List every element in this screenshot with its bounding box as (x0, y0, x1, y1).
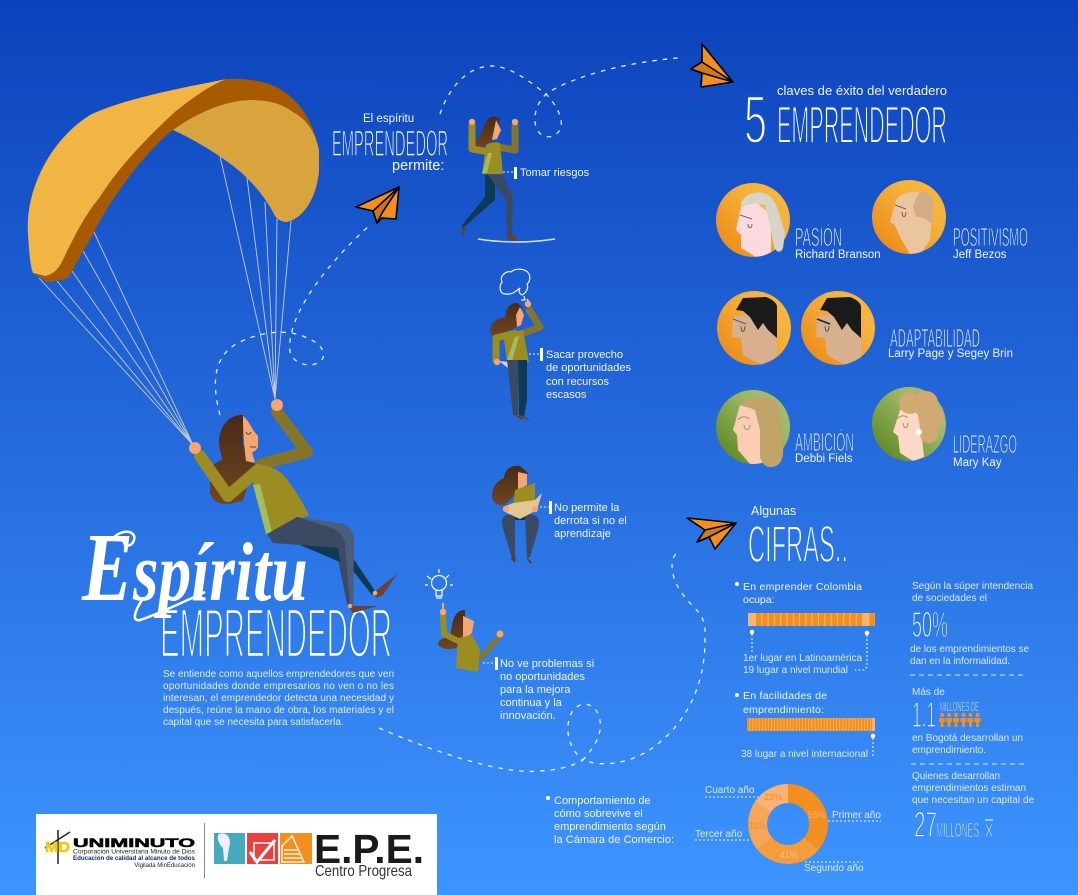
label: No ve problemas: no oportunidades (500, 671, 586, 683)
logo: E.P.E. wordmark: Centro Progresa (315, 863, 412, 880)
logo: Uniminuto: MD (45, 839, 70, 856)
label: No ve problemas (483, 657, 594, 722)
logo: E.P.E. icons (214, 833, 312, 864)
heading: 5 claves (744, 82, 947, 158)
donut chart: survival by year: 23% (764, 792, 782, 802)
logo: E.P.E. wordmark: E.P.E. (314, 826, 424, 872)
paraglider illustration (28, 79, 397, 613)
dashed flight path: from paraglider to paper plane (215, 225, 370, 415)
label: Tomar riesgos: Tomar riesgos (520, 167, 590, 179)
donut chart: survival by year: 41% (780, 850, 798, 860)
heading: Algunas cifras: Algunas (751, 504, 796, 518)
heading: Algunas cifras (748, 504, 848, 574)
label: No ve problemas: continua y la (500, 697, 563, 709)
logo footer panel (36, 814, 437, 895)
stat: 50% informality: dan en la informalidad. (910, 656, 1010, 667)
paper plane: top (691, 44, 733, 87)
stat: 27 million capital: que necesitan un capital de (912, 795, 1034, 806)
label: Comportamiento: emprendimiento según (554, 821, 666, 833)
dashed flight path: bottom loop (379, 550, 705, 771)
label: No ve problemas: No ve problemas si (500, 658, 594, 670)
stat: Colombia ranking: 1er lugar en Latinoamérica (743, 653, 862, 664)
figure: woman with thought cloud (490, 269, 540, 421)
label: Liderazgo (953, 429, 1017, 469)
stat: 27 million capital: X (985, 821, 993, 841)
figure: woman taking risks (461, 117, 555, 242)
stat: 50% informality: Según la súper intendencia (912, 581, 1033, 592)
heading: El espíritu emprendedor permite: El espíritu (363, 113, 414, 125)
stat: 50% informality: de sociedades el (912, 593, 987, 604)
paraglider lines (39, 156, 291, 445)
heading: 5 claves: 5 (744, 82, 767, 158)
donut chart: survival by year: 55% (808, 810, 826, 820)
portrait: Debbi Fields (716, 390, 790, 467)
stat: 27 million capital: MILLONES (936, 820, 979, 842)
donut chart: survival by year: 31% (748, 821, 766, 831)
stat: 1.1 million people: en Bogotá desarrollan un (912, 733, 1023, 744)
label: Sacar provecho: con recursos (546, 376, 609, 388)
text: CIFRAS.. (748, 516, 848, 574)
stat: 50% informality: 50% (912, 604, 948, 645)
label: Pasión: Richard Branson (795, 249, 881, 261)
label: Positivismo (953, 222, 1028, 261)
canopy (28, 79, 321, 282)
label: Sacar provecho: Sacar provecho (546, 349, 623, 361)
portrait: Mary Kay (872, 387, 946, 461)
logo: Uniminuto: Vigilada MinEducación (134, 863, 195, 869)
label: No permite la derrota: aprendizaje (554, 528, 611, 540)
heading: El espíritu emprendedor permite (332, 113, 448, 174)
progress bar: rank (748, 613, 875, 626)
portrait: Jeff Bezos (872, 180, 946, 254)
portrait: Larry Page (717, 291, 791, 365)
donut chart: survival by year: Segundo año (804, 863, 864, 874)
label: Adaptabilidad: Larry Page y Segey Brin (888, 348, 1013, 360)
donut chart: survival by year (695, 784, 881, 874)
stat: Colombia ranking: 19 lugar a nivel mundial (743, 665, 848, 676)
portrait: Richard Branson (716, 183, 790, 257)
paper plane: lower-left of top section (356, 187, 399, 223)
stat: 1.1 million people: Más de (912, 687, 945, 698)
description paragraph: oportunidades donde empresarios no ven o no les (163, 681, 394, 692)
stat: Colombia ranking: ocupa: (743, 594, 775, 606)
stat: 27 million capital: Quienes desarrollan (912, 771, 1000, 782)
figure: woman reading map (492, 466, 542, 564)
paper plane: cifras (687, 518, 736, 549)
figure: woman with light bulb (425, 569, 504, 672)
stat: 1.1 million people: emprendimiento. (912, 745, 986, 756)
stat: 1.1 million people: 1.1 (912, 694, 936, 735)
label: Positivismo: Jeff Bezos (953, 249, 1007, 261)
label: Adaptabilidad (888, 323, 1013, 360)
logo: Uniminuto: Educación de calidad al alcance de todos (73, 856, 196, 862)
label: Comportamiento: Comportamiento de (554, 795, 651, 807)
portrait: Sergey Brin (801, 291, 875, 365)
label: Ambición: Debbi Fiels (795, 453, 853, 465)
donut chart: survival by year: Cuarto año (705, 785, 755, 796)
icon: people row (939, 713, 980, 727)
text: AMBICIÓN (795, 427, 854, 457)
logo: Uniminuto (45, 830, 196, 869)
label: Ambición (795, 427, 854, 465)
heading: 5 claves: claves de éxito del verdadero (777, 84, 947, 98)
label: Comportamiento (546, 795, 674, 846)
stat: 50% informality: de los emprendimientos se (910, 644, 1029, 655)
stat: 1.1 million people (912, 687, 1023, 756)
description paragraph: Se entiende como aquellos emprendedores que ven (163, 669, 394, 680)
label: Liderazgo: Mary Kay (953, 457, 1002, 469)
stat: 1.1 million people: MILLONES DE (940, 699, 979, 714)
donut chart: survival by year: Tercer año (695, 829, 743, 840)
stat: ease of entrepreneurship: emprendimiento: (743, 704, 824, 716)
dashed flight path: top loop (440, 58, 678, 137)
stat: ease of entrepreneurship (735, 690, 875, 760)
label: No permite la derrota: derrota si no el (554, 515, 627, 527)
stat: Colombia ranking (735, 581, 875, 676)
stat: 27 million capital: 27 (914, 804, 937, 845)
description paragraph: capital que se necesita para satisfacerla. (163, 717, 344, 728)
label: Comportamiento: cómo sobrevive el (554, 808, 643, 820)
text: EMPRENDEDOR (160, 594, 392, 672)
description paragraph: después, reúne la mano de obra, los materiales y el (163, 705, 394, 716)
description paragraph: interesan, el emprendedor detecta una necesidad y (163, 693, 394, 704)
label: Sacar provecho (529, 348, 632, 401)
label: No permite la derrota: No permite la (554, 502, 620, 514)
main title word: Espíritu: Espíritu (81, 514, 308, 622)
stat: 27 million capital: emprendimientos estiman (912, 783, 1026, 794)
progress bar: international rank (747, 718, 875, 731)
description paragraph (163, 669, 394, 728)
label: Sacar provecho: escasos (546, 389, 587, 401)
label: Pasión: PASIÓN (795, 222, 842, 252)
stat: ease of entrepreneurship: En facilidades de (743, 690, 827, 702)
stat: 27 million capital (912, 771, 1034, 845)
stat: 50% informality (910, 581, 1033, 667)
woman paragliding (189, 399, 397, 613)
logo: Uniminuto: Corporación Universitaria Minuto de Dios (73, 850, 195, 856)
icon: light bulb (425, 569, 453, 598)
label: Sacar provecho: de oportunidades (546, 362, 632, 374)
donut chart: survival by year: Primer año (832, 810, 881, 821)
label: No ve problemas: para la mejora (500, 684, 571, 696)
logo: Uniminuto: UNIMINUTO (73, 838, 195, 850)
label: Comportamiento: la Cámara de Comercio: (554, 834, 674, 846)
label: No permite la derrota (540, 501, 627, 540)
heading: El espíritu emprendedor permite: permite: (392, 158, 444, 174)
label: No ve problemas: innovación. (500, 710, 556, 722)
stat: Colombia ranking: En emprender Colombia (743, 581, 862, 593)
stat: ease of entrepreneurship: 38 lugar a nivel internacional (741, 749, 868, 760)
text: EMPRENDEDOR (332, 123, 448, 164)
